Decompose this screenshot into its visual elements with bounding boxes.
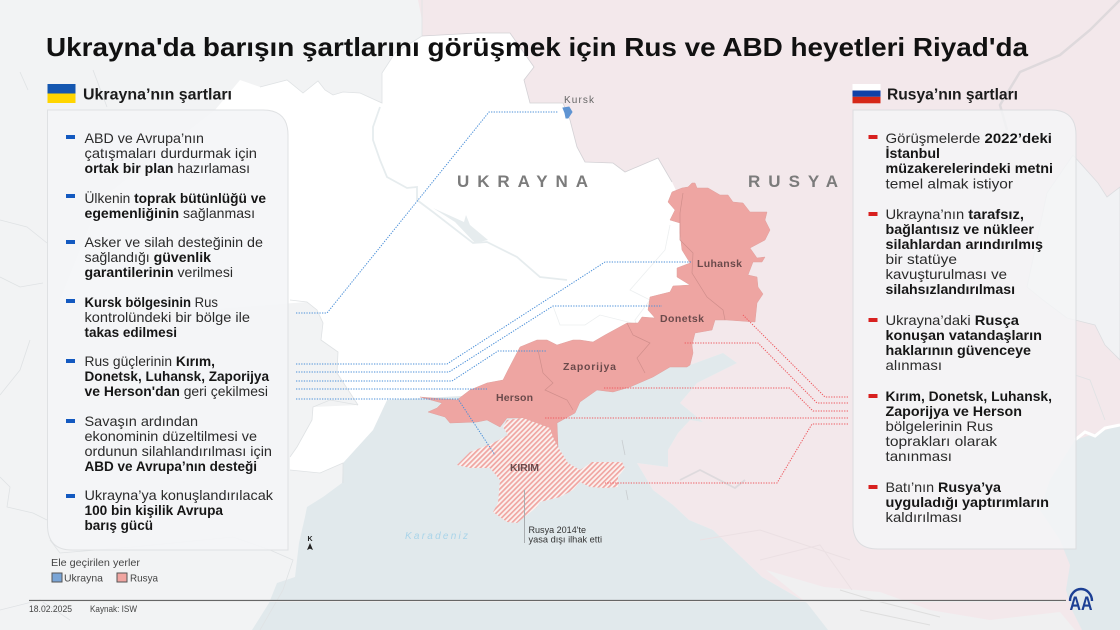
map labels: Karadeniz xyxy=(405,531,468,542)
condition 5 xyxy=(868,479,1049,525)
map labels: Donetsk xyxy=(660,313,704,325)
condition 3: garantilerinin verilmesi xyxy=(84,264,233,280)
condition 6: Savaşın ardından xyxy=(84,413,198,429)
condition 3: Asker ve silah desteğinin de xyxy=(84,234,263,250)
condition 2: bir statüye xyxy=(886,251,957,267)
map labels: Kursk xyxy=(564,95,595,106)
occupied territories: russia xyxy=(420,183,770,447)
legend: Ukrayna xyxy=(64,572,103,584)
russia area xyxy=(418,0,1120,630)
condition 5: Batı’nın Rusya’ya xyxy=(886,479,1001,495)
condition 1: İstanbul xyxy=(886,145,940,161)
legend: Ele geçirilen yerler xyxy=(51,557,141,569)
condition 3 xyxy=(66,234,263,280)
crimea annotation xyxy=(524,490,602,546)
condition 5: ve Herson'dan geri çekilmesi xyxy=(84,383,268,399)
condition 6 xyxy=(66,413,272,474)
kazakhstan area xyxy=(1027,155,1120,360)
condition 1: çatışmaları durdurmak için xyxy=(84,145,257,161)
map labels: Zaporijya xyxy=(563,361,616,373)
condition 7: 100 bin kişilik Avrupa xyxy=(84,502,223,518)
condition 1: ortak bir plan hazırlaması xyxy=(84,160,250,176)
red connector lines xyxy=(545,315,848,483)
crimea annotation: yasa dışı ilhak etti xyxy=(528,534,602,546)
map labels: Herson xyxy=(496,392,533,404)
condition 7: barış gücü xyxy=(84,517,153,533)
black sea and azov xyxy=(252,353,828,630)
eastern sea xyxy=(1040,425,1120,630)
condition 6: ABD ve Avrupa’nın desteği xyxy=(84,458,257,474)
condition 1 xyxy=(868,130,1053,192)
condition 2 xyxy=(66,189,266,221)
north arrow xyxy=(307,536,313,550)
condition 4: Kırım, Donetsk, Luhansk, xyxy=(886,388,1052,404)
heading: ukraine conditions: Ukrayna’nın şartları xyxy=(83,86,232,104)
map labels: RUSYA xyxy=(748,172,838,191)
flag: russia xyxy=(852,84,880,103)
legend: Rusya xyxy=(130,572,158,584)
crimea annotation: Rusya 2014'te xyxy=(528,525,586,536)
blue connector lines xyxy=(296,112,692,455)
condition 7: Ukrayna’ya konuşlandırılacak xyxy=(84,487,274,503)
panel: ukraine conditions xyxy=(48,84,288,550)
condition 4: kontrolündeki bir bölge ile xyxy=(84,309,250,325)
condition 3: alınması xyxy=(886,357,942,373)
condition 2: egemenliğinin sağlanması xyxy=(84,205,255,221)
footer: 18.02.2025 xyxy=(29,604,72,615)
condition 3: haklarının güvenceye xyxy=(886,342,1031,358)
condition 5: kaldırılması xyxy=(886,509,962,525)
panel background xyxy=(853,110,1076,549)
caucasus area xyxy=(766,570,1075,630)
condition 5 xyxy=(66,353,269,399)
north arrow: K xyxy=(307,536,313,543)
condition 4 xyxy=(868,388,1052,464)
condition 2: Ukrayna’nın tarafsız, xyxy=(886,206,1024,222)
condition 1: ABD ve Avrupa’nın xyxy=(84,130,204,146)
footer xyxy=(29,600,1066,615)
ukraine area xyxy=(60,33,700,473)
condition 5: Rus güçlerinin Kırım, xyxy=(84,353,215,369)
title: Ukrayna'da barışın şartlarını görüşmek için Rus ve ABD heyetleri Riyad'da xyxy=(46,32,1029,62)
map labels: Luhansk xyxy=(697,258,742,270)
dnieper river xyxy=(373,107,567,280)
panel: russia conditions xyxy=(852,84,1076,549)
condition 1: temel almak istiyor xyxy=(886,176,1013,192)
condition 4: toprakları olarak xyxy=(886,433,998,449)
condition 5: Donetsk, Luhansk, Zaporijya xyxy=(84,368,269,384)
crimea hatched area xyxy=(457,418,625,523)
condition 2: silahsızlandırılması xyxy=(886,281,1015,297)
condition 1 xyxy=(66,130,257,176)
condition 7 xyxy=(66,487,274,533)
condition 4: bölgelerinin Rus xyxy=(886,418,993,434)
condition 2: bağlantısız ve nükleer xyxy=(886,221,1035,237)
logo: anadolu agency: AA xyxy=(1070,594,1093,615)
legend xyxy=(51,557,158,584)
condition 2: Ülkenin toprak bütünlüğü ve xyxy=(84,189,266,206)
oblast borders xyxy=(538,193,725,410)
condition 4: Kursk bölgesinin Rus xyxy=(84,294,218,310)
condition 3: Ukrayna’daki Rusça xyxy=(886,312,1019,328)
flag: ukraine xyxy=(48,84,76,103)
condition 2 xyxy=(868,206,1043,297)
footer: Kaynak: ISW xyxy=(90,604,137,615)
condition 4 xyxy=(66,294,250,340)
condition 3: sağlandığı güvenlik xyxy=(84,249,211,265)
kursk occupied area xyxy=(563,107,572,118)
condition 4: takas edilmesi xyxy=(84,324,177,340)
condition 3: konuşan vatandaşların xyxy=(886,327,1042,343)
condition 4: Zaporijya ve Herson xyxy=(886,403,1022,419)
condition 6: ordunun silahlandırılması için xyxy=(84,443,272,459)
condition 3 xyxy=(868,312,1042,373)
condition 5: uyguladığı yaptırımların xyxy=(886,494,1049,510)
panel background xyxy=(48,110,288,550)
condition 2: kavuşturulması ve xyxy=(886,266,1007,282)
condition 4: tanınması xyxy=(886,448,952,464)
map labels xyxy=(405,95,838,542)
heading: russia conditions: Rusya’nın şartları xyxy=(887,86,1018,104)
condition 1: müzakerelerindeki metni xyxy=(886,160,1053,176)
condition 2: silahlardan arındırılmış xyxy=(886,236,1043,252)
condition 1: Görüşmelerde 2022’deki xyxy=(886,130,1052,146)
map labels: KIRIM xyxy=(510,462,539,474)
condition 6: ekonominin düzeltilmesi ve xyxy=(84,428,257,444)
map labels: UKRAYNA xyxy=(457,172,588,191)
